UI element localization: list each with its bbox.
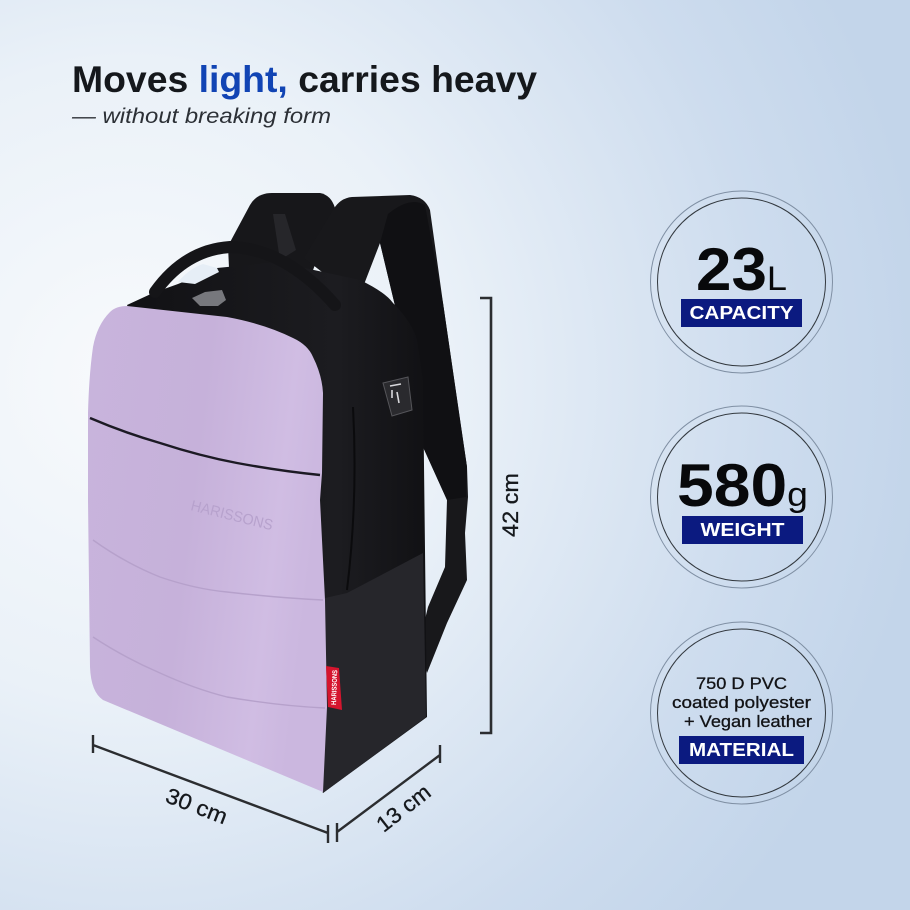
right shoulder strap	[304, 195, 468, 673]
left shoulder strap	[228, 193, 335, 290]
subtitle: — without breaking form	[71, 105, 331, 128]
badge: material	[650, 622, 832, 804]
front pocket zipper	[90, 418, 320, 475]
material description: coated polyester	[672, 693, 811, 712]
height label: 42 cm	[498, 473, 523, 537]
strap webbing	[273, 214, 296, 260]
weight label: WEIGHT	[700, 520, 784, 540]
width label: 30 cm	[162, 783, 231, 829]
depth label: 13 cm	[371, 779, 436, 837]
carry handle	[155, 247, 335, 305]
capacity label bar	[681, 299, 802, 327]
strap mesh padding	[380, 202, 467, 500]
backpack illustration	[88, 193, 468, 793]
tag mark	[390, 384, 401, 403]
weight label bar	[682, 516, 803, 544]
title: Moves light, carries heavy	[72, 59, 537, 100]
badge: capacity	[650, 191, 832, 373]
dimension: height	[480, 298, 523, 733]
side loop tag	[383, 377, 412, 416]
zipper puller	[192, 290, 226, 306]
bottom side panel	[323, 553, 426, 793]
embossed logo: HARISSONS	[189, 497, 275, 534]
weight value: 580 g	[677, 452, 808, 519]
lower quilt seam	[93, 637, 325, 708]
material description: + Vegan leather	[684, 712, 812, 731]
dimension: width	[93, 735, 328, 843]
material label: MATERIAL	[689, 740, 794, 760]
handle gap	[178, 264, 219, 284]
dimension: depth	[337, 745, 440, 842]
upper quilt seam	[93, 540, 323, 600]
red brand label	[326, 666, 342, 710]
label text: HARISSONS	[331, 670, 339, 705]
material label bar	[679, 736, 804, 764]
badge: weight	[650, 406, 832, 588]
side seam	[347, 407, 355, 590]
lilac front panel	[88, 306, 327, 792]
capacity label: CAPACITY	[690, 303, 794, 323]
bag body	[127, 262, 427, 793]
capacity value: 23L	[696, 236, 787, 303]
material description: 750 D PVC	[696, 674, 787, 693]
